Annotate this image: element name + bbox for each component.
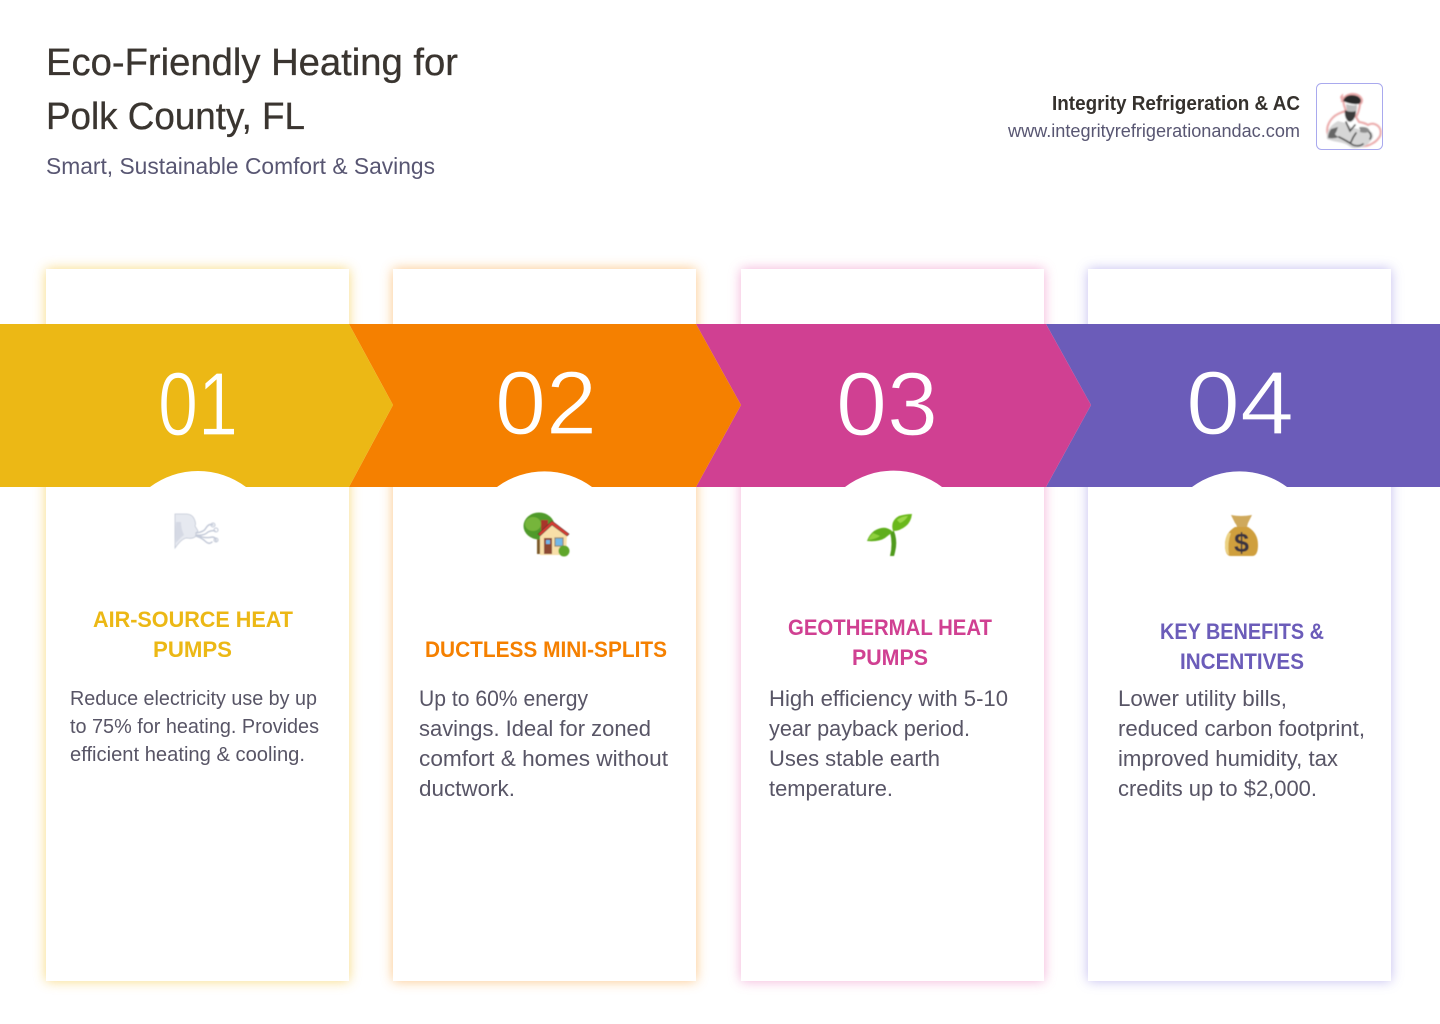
title [46,42,458,138]
text: ductless mini-splits: Up to 60% energy [419,686,588,711]
heading: key benefits and incentives: INCENTIVES [1180,649,1304,674]
heading: geothermal heat pumps [788,615,993,670]
text: geothermal heat pumps: High efficiency with 5-10 [769,686,1008,711]
arrow band: step 3 [696,324,1091,487]
text: air-source heat pumps [70,688,319,766]
text: ductless mini-splits: ductwork. [419,776,515,801]
text: key benefits and incentives: reduced carbon footprint, [1118,716,1365,741]
text: key benefits and incentives: improved humidity, tax [1118,746,1338,771]
heading: air-source heat pumps: AIR-SOURCE HEAT [93,607,294,632]
text: key benefits and incentives: Lower utility bills, [1118,686,1287,711]
title: Eco-Friendly Heating for [46,42,458,84]
heading: ductless mini-splits: DUCTLESS MINI-SPLITS [425,637,667,662]
icon: seedling [867,514,912,556]
text: geothermal heat pumps: Uses stable earth [769,746,940,771]
heading: geothermal heat pumps: PUMPS [852,645,928,670]
text: air-source heat pumps: to 75% for heating. Provides [70,716,319,738]
icon: money bag [1225,515,1258,558]
panel: card 3 [741,269,1044,981]
arrow band: step 2 [349,324,741,487]
heading: geothermal heat pumps: GEOTHERMAL HEAT [788,615,993,640]
number 01: 01 [158,355,238,455]
heading: air-source heat pumps [93,607,294,662]
company name and website [1007,93,1300,141]
company name and website: Integrity Refrigeration & AC [1052,93,1300,115]
text: key benefits and incentives [1118,686,1365,801]
text: ductless mini-splits [419,686,668,801]
icon: wind face [175,514,218,548]
panel: card 4 [1088,269,1391,981]
icon notch: card 1 [150,471,246,487]
icon: house with tree [524,512,570,556]
text: geothermal heat pumps [769,686,1008,801]
text: ductless mini-splits: savings. Ideal for zoned [419,716,651,741]
heading: key benefits and incentives: KEY BENEFITS & [1160,619,1324,644]
panel: card 2 [393,269,696,981]
text: ductless mini-splits: comfort & homes without [419,746,668,771]
text: air-source heat pumps: Reduce electricity use by up [70,688,317,710]
icon: money bag: $ [1234,528,1249,558]
subtitle: Smart, Sustainable Comfort & Savings [46,153,435,179]
title: Polk County, FL [46,96,305,138]
arrow band: step 1 [0,324,393,487]
number 02: 02 [495,354,597,454]
text: air-source heat pumps: efficient heating & cooling. [70,744,305,766]
text: geothermal heat pumps: temperature. [769,776,893,801]
icon notch: card 3 [845,471,942,487]
heading: air-source heat pumps: PUMPS [153,637,232,662]
icon notch: card 2 [497,471,592,487]
logo: technician sketch [1316,84,1382,150]
number 03: 03 [836,355,938,455]
text: geothermal heat pumps: year payback period. [769,716,970,741]
icon notch: card 4 [1192,471,1287,487]
company name and website: www.integrityrefrigerationandac.com [1007,121,1300,141]
arrow band: step 4 [1046,324,1440,487]
text: key benefits and incentives: credits up to $2,000. [1118,776,1317,801]
panel: card 1 [46,269,349,981]
number 04: 04 [1186,354,1294,454]
heading: key benefits and incentives [1160,619,1324,674]
